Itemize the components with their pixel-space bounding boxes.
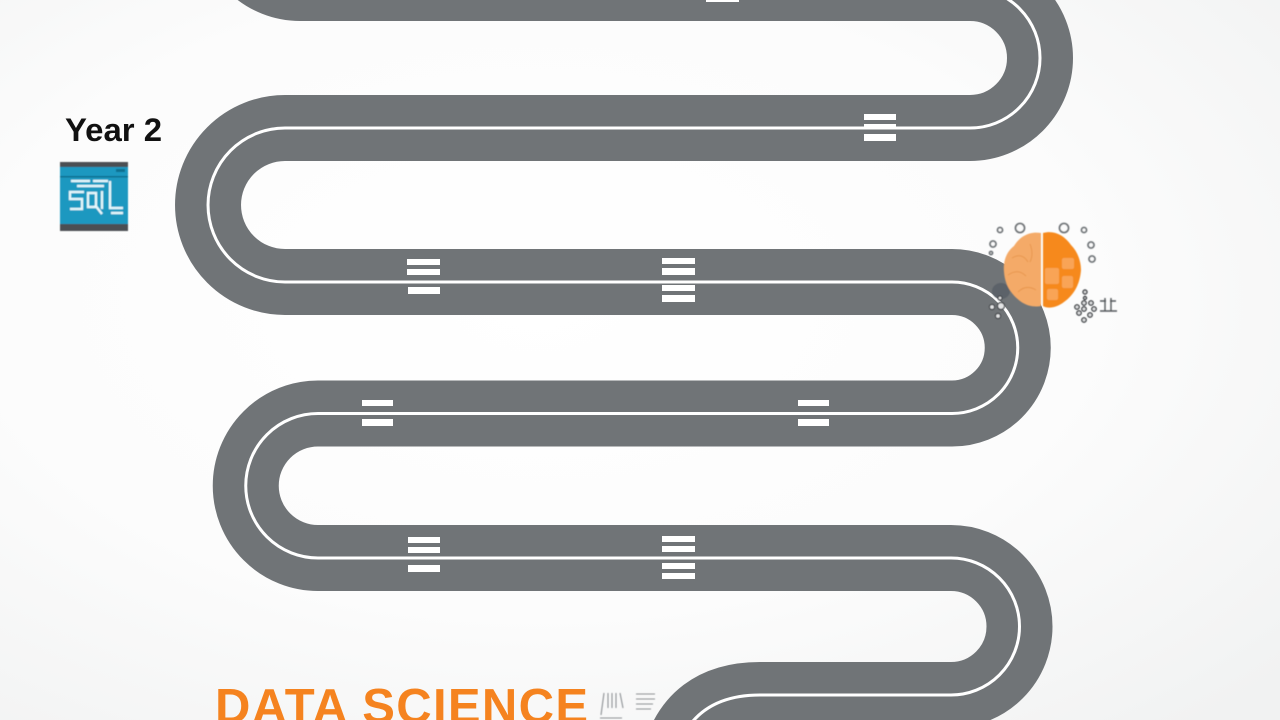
idea bubbles — [990, 224, 1095, 262]
brain left hemisphere — [1004, 233, 1041, 306]
data dots cluster right — [1075, 290, 1096, 322]
road markings — [362, 0, 896, 579]
icon: brain — [990, 224, 1117, 322]
winding road — [208, 0, 1040, 720]
icon: SQL code window — [60, 162, 128, 231]
heading: Year 2: Year 2 — [65, 112, 162, 148]
small decorative glyphs — [600, 693, 655, 718]
data dots cluster left — [990, 296, 1004, 318]
road shadow under brain — [992, 283, 1010, 299]
brain right hemisphere — [1043, 232, 1081, 308]
